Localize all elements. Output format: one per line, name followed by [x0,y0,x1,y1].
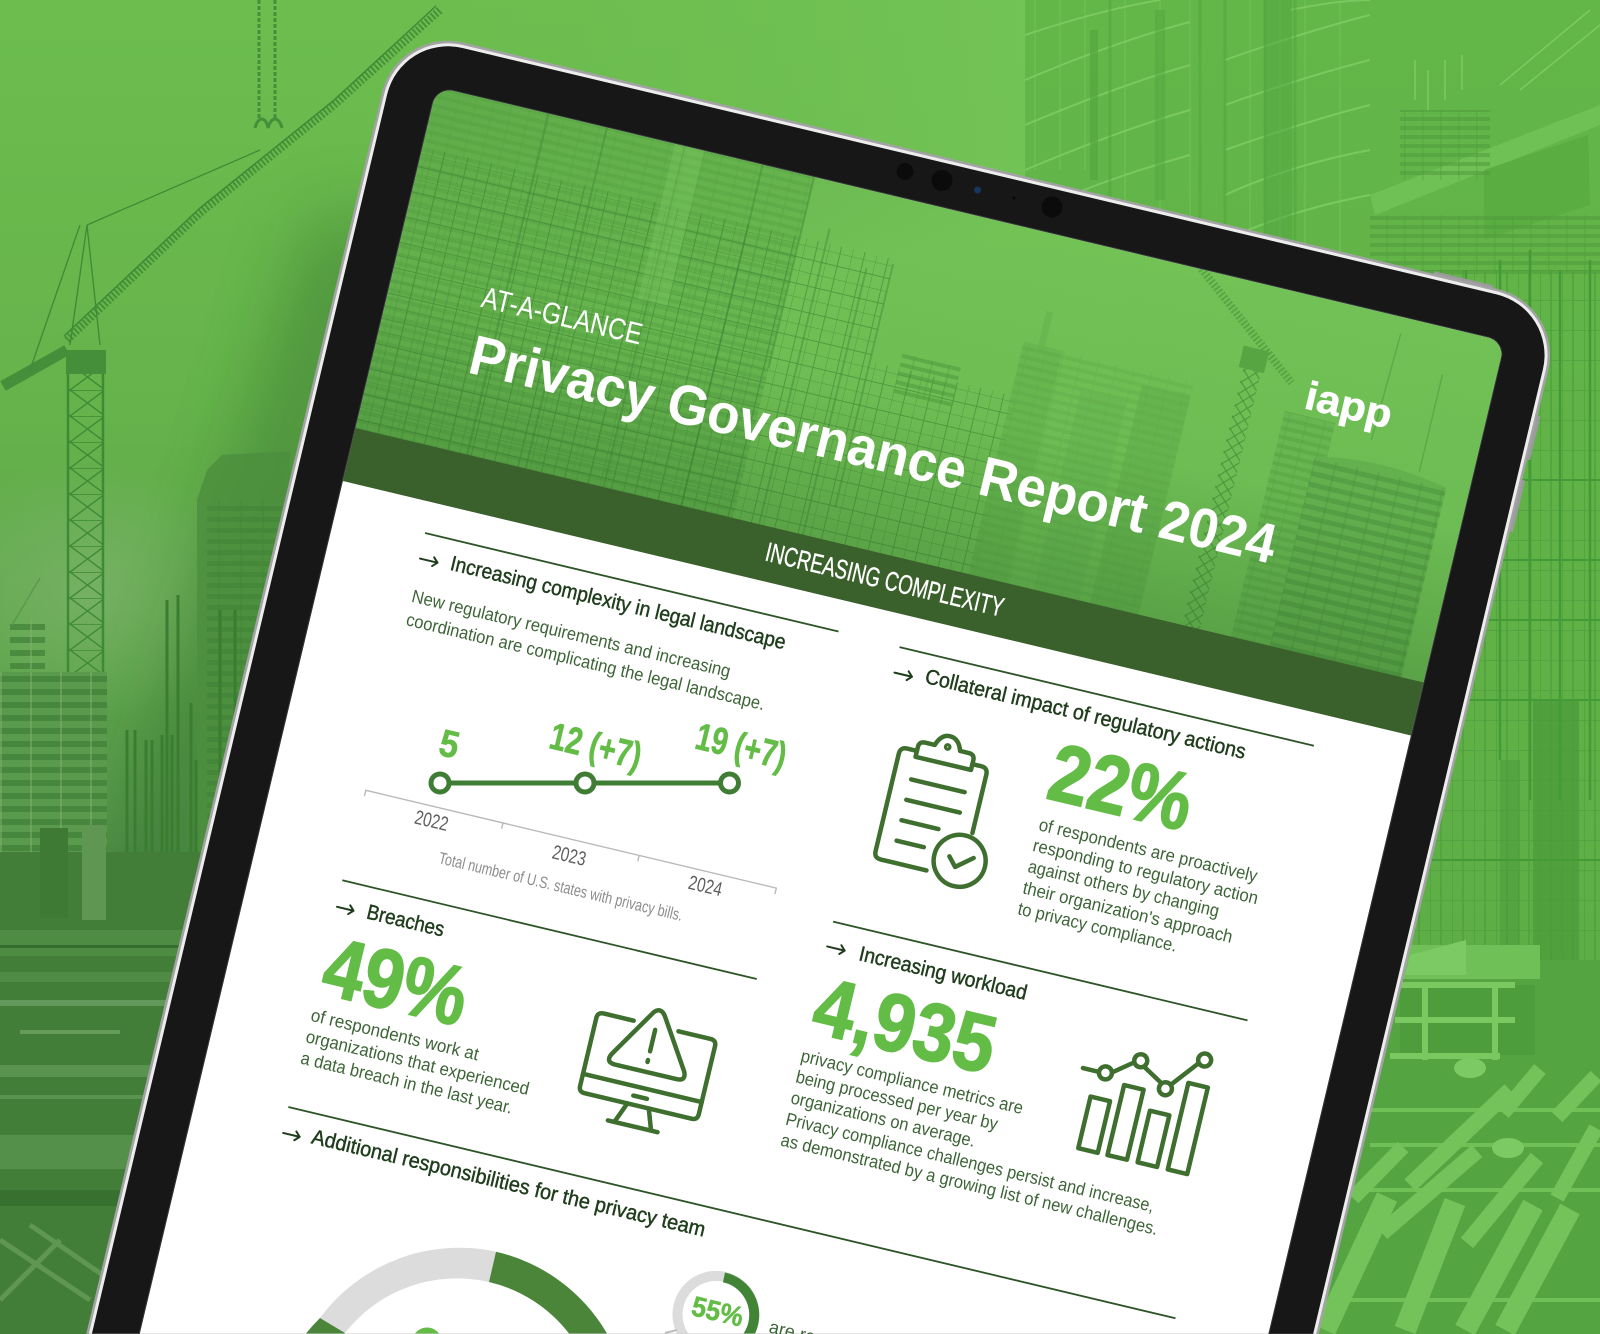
description: organizations that experienced [304,1026,531,1099]
description: privacy compliance metrics are [799,1046,1025,1118]
small donut chart [665,1271,759,1334]
beams and formwork [1325,940,1600,1334]
curved tower facade [1025,0,1370,310]
crane in header [1184,269,1443,628]
stat: 55%: 55% [689,1290,747,1333]
iapp logo: iapp [1301,374,1397,437]
heading: Increasing complexity in legal landscape [448,552,788,654]
description: Privacy compliance challenges persist and increase, [784,1109,1156,1216]
arrow [419,556,438,568]
panel: increasing workload [779,922,1247,1248]
screen outline [139,86,1506,1334]
arrow [826,944,846,955]
stat: 22%: 22% [1040,727,1202,849]
high-rise building [197,451,300,900]
heading: Breaches [364,901,447,941]
description: as demonstrated by a growing list of new challenges. [779,1130,1160,1239]
panel: legal landscape [350,533,838,945]
heading: Additional responsibilities for the privacy team [309,1126,708,1242]
description: being processed per year by [794,1067,1000,1134]
description: organizations on average. [789,1088,977,1151]
report title: Privacy Governance Report 2024 [464,323,1283,576]
description: a data breach in the last year. [299,1048,515,1118]
side buttons [1380,273,1566,532]
dark section band [343,428,1424,736]
description: to privacy compliance. [1016,898,1179,956]
description: responding to regulatory action [1031,835,1260,908]
description: against others by changing [1026,856,1221,921]
chart values: 12 (+7) [546,716,646,778]
timeline axis [364,790,776,894]
large donut chart [306,1248,607,1334]
scaffold grid [1400,250,1600,1040]
front camera array [896,163,1062,218]
axis years: 2022 [412,807,450,836]
upper right slab [1370,10,1600,275]
heading: Increasing workload [857,942,1029,1005]
icon: clipboard with check [873,734,989,890]
chart values: 19 (+7) [691,716,791,778]
icon: monitor with warning [578,1008,718,1134]
line chart [431,774,738,792]
arrow [282,1129,301,1141]
description: New regulatory requirements and increasing [410,586,733,681]
description: coordination are complicating the legal landscape. [404,609,767,714]
eyebrow text: AT-A-GLANCE [478,281,646,351]
axis years [414,810,722,896]
stat: 49%: 49% [314,919,477,1044]
panel: breaches [300,879,757,1134]
low concrete building [0,578,107,852]
icon: bar and line chart [1076,1051,1214,1176]
crane [3,0,440,820]
skyline towers [968,307,1465,678]
axis years: 2024 [686,872,724,901]
chart values: 5 [435,722,463,767]
haze in the sky [0,460,260,720]
band heading: INCREASING COMPLEXITY [763,537,1007,623]
description: their organization's approach [1021,878,1235,947]
tablet screen [140,87,1505,1334]
stat: 4,935: 4,935 [805,961,1005,1092]
header photo panel [355,87,1505,683]
description [780,1052,1156,1235]
scaffolded building [356,90,812,424]
background: right tower and scaffold scene [1025,0,1600,1334]
description [300,1010,530,1114]
chart caption: Total number of U.S. states with privacy bills. [437,849,684,925]
description: of respondents are proactively [1037,815,1259,886]
axis years: 2023 [550,842,588,871]
tablet cast shadow [60,220,400,1050]
description: of respondents work at [309,1005,481,1064]
rebar poles [127,595,235,950]
description [1018,820,1258,952]
ground and timber [0,825,260,1334]
dark facade column [1264,0,1292,270]
chart values [439,724,786,776]
arrow [894,670,913,682]
arrow [336,902,355,915]
mid-rise blocks [827,361,1016,576]
heading: Collateral impact of regulatory actions [923,665,1248,764]
panel: additional responsibilities [238,1107,1175,1334]
panel: collateral impact [873,646,1314,952]
